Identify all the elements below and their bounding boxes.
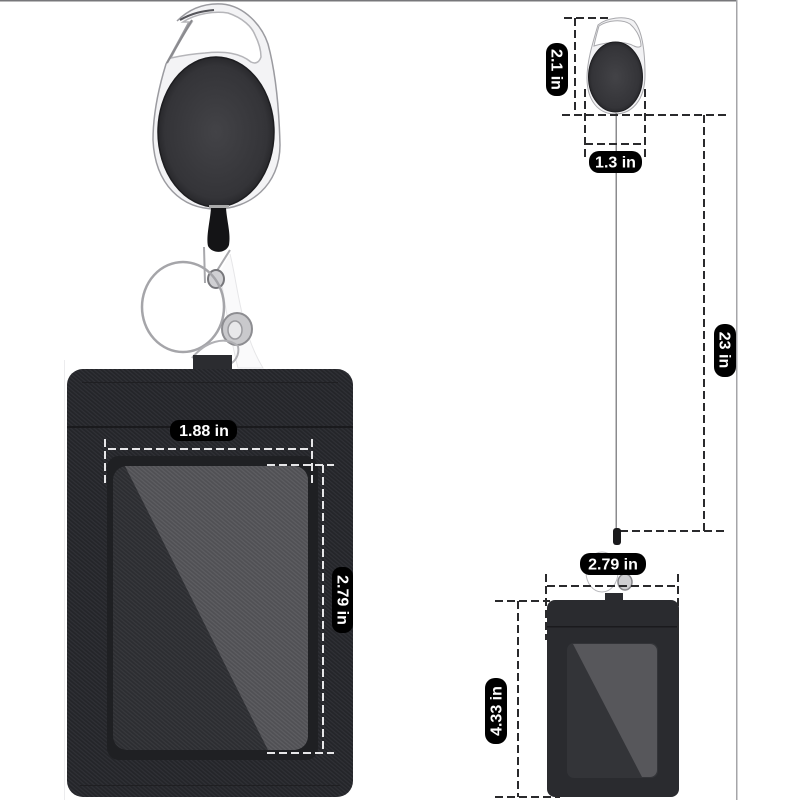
small carabiner [587, 18, 645, 114]
dimension: 1.3 in [585, 89, 645, 173]
small cord grommet and key ring [586, 528, 632, 602]
carabiner opening [171, 12, 261, 63]
large ID card holder [67, 369, 353, 797]
small badge reel [587, 18, 645, 114]
label 2.79 in width: 2.79 in [588, 556, 638, 574]
holder body [67, 369, 353, 797]
small window light area [573, 644, 657, 777]
large badge reel with carabiner clip [142, 4, 280, 371]
reel body [158, 57, 274, 207]
small window sleeve [567, 643, 658, 778]
label 2.79 in [332, 567, 353, 633]
dimension: 2.79 in width [546, 553, 678, 640]
carabiner gate [167, 20, 192, 63]
label 23 in: 23 in [716, 332, 732, 368]
dimension: 2.1 in [546, 18, 610, 115]
label 2.79 in: 2.79 in [334, 575, 350, 625]
retractable cord [616, 113, 617, 528]
small reel body [588, 42, 642, 112]
label 2.1 in: 2.1 in [548, 49, 564, 90]
dimension: 23 in [562, 115, 736, 531]
metal clip [204, 247, 230, 283]
window sleeve dark [113, 466, 308, 750]
dimension: 4.33 in [485, 601, 560, 797]
window recess [107, 456, 318, 760]
window light area [125, 466, 308, 750]
dimension: 2.79 in [267, 465, 353, 753]
label 1.3 in: 1.3 in [595, 154, 636, 172]
small holder body [547, 600, 679, 797]
label 4.33 in [485, 678, 507, 744]
label 1.88 in: 1.88 in [179, 423, 229, 440]
clear strap [220, 254, 263, 368]
black cord grommet [207, 208, 230, 252]
top pocket seam [67, 426, 353, 428]
small ID card holder [547, 600, 679, 797]
label 23 in [714, 324, 736, 377]
dimension: 1.88 in [105, 420, 312, 483]
carabiner frame [153, 4, 280, 209]
label 4.33 in: 4.33 in [488, 686, 506, 736]
split key ring [142, 262, 224, 352]
card loop tab [193, 355, 232, 371]
label 1.88 in [170, 420, 237, 441]
snap button [222, 313, 252, 345]
